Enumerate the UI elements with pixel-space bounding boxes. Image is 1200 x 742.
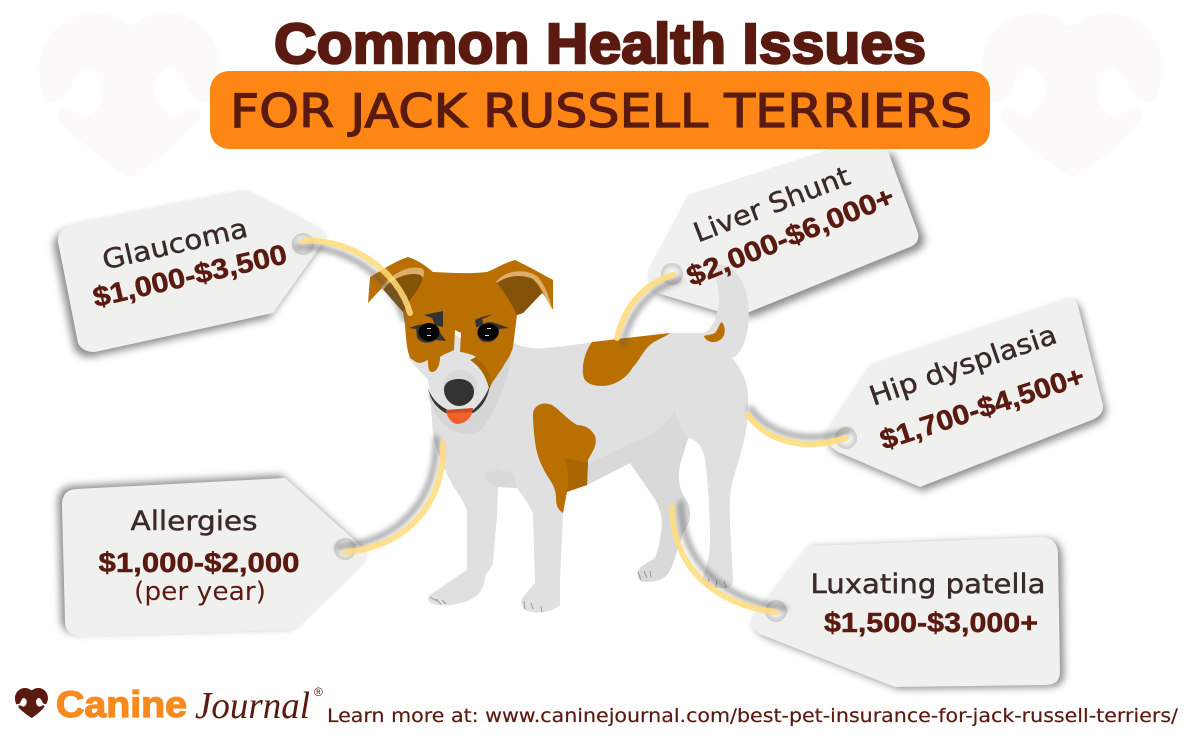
logo word journal: Journal: [195, 685, 310, 727]
muzzle side shade: [470, 357, 492, 389]
nose: [444, 379, 474, 406]
left ear inner: [382, 271, 423, 312]
label: glaucoma: Glaucoma: [99, 213, 251, 276]
label: allergies: Allergies: [130, 506, 258, 537]
subtitle banner: FOR JACK RUSSELL TERRIERS: [230, 84, 972, 138]
head and ears: [368, 257, 553, 383]
registered mark: ®: [314, 685, 323, 699]
logo heart: [15, 688, 48, 718]
left ear edge: [381, 268, 424, 290]
rope: liver shunt: [617, 275, 679, 343]
paw toes: [430, 571, 726, 612]
subtitle banner: [210, 71, 990, 149]
label: luxating patella: Luxating patella: [810, 569, 1046, 600]
label: hip dysplasia: Hip dysplasia: [866, 319, 1061, 413]
title: Common Health Issues: [274, 12, 926, 76]
footer logo: [15, 684, 323, 727]
tail spot: [704, 322, 725, 342]
tag: glaucoma: [54, 190, 326, 357]
belly and far leg shadow: [587, 410, 690, 582]
back spot: [583, 333, 670, 386]
rope: allergies: [338, 438, 443, 552]
rope: glaucoma: [297, 241, 410, 319]
dog body: [428, 264, 749, 613]
price: hip dysplasia: $1,700-$4,500+: [876, 360, 1088, 456]
watermark heart right: [981, 13, 1162, 178]
mouth: [428, 385, 490, 414]
rope: luxating patella: [672, 503, 785, 612]
chest fold: [485, 468, 517, 488]
price: allergies: $1,000-$2,000: [98, 547, 300, 578]
left eye and brow: [409, 311, 446, 343]
tongue: [446, 408, 473, 424]
tag: liver shunt: [648, 149, 924, 317]
price: liver shunt: $2,000-$6,000+: [682, 180, 899, 292]
right ear edge: [496, 271, 552, 309]
note: per year: (per year): [134, 577, 266, 607]
shoulder spot: [533, 403, 596, 513]
rope: hip dysplasia: [748, 408, 848, 444]
logo word canine: Canine: [56, 684, 187, 725]
price: glaucoma: $1,000-$3,500: [90, 238, 290, 313]
watermark heart left: [39, 13, 220, 178]
illustration: jack russell terrier: [368, 257, 749, 613]
right eye and brow: [475, 314, 509, 342]
right ear inner: [496, 275, 542, 315]
face shadow: [428, 345, 510, 434]
tag: hip dysplasia: [826, 298, 1106, 491]
price: luxating patella: $1,500-$3,000+: [824, 607, 1038, 638]
label: liver shunt: Liver Shunt: [689, 161, 855, 249]
tag: luxating patella: [751, 537, 1064, 689]
face white: [408, 335, 505, 416]
nose patch: [443, 370, 477, 400]
tag: allergies: [58, 475, 367, 636]
footer link text: Learn more at: www.caninejournal.com/best-pet-insurance-for-jack-russell-terriers/: [327, 705, 1179, 727]
shoulder spot shade: [565, 458, 588, 491]
